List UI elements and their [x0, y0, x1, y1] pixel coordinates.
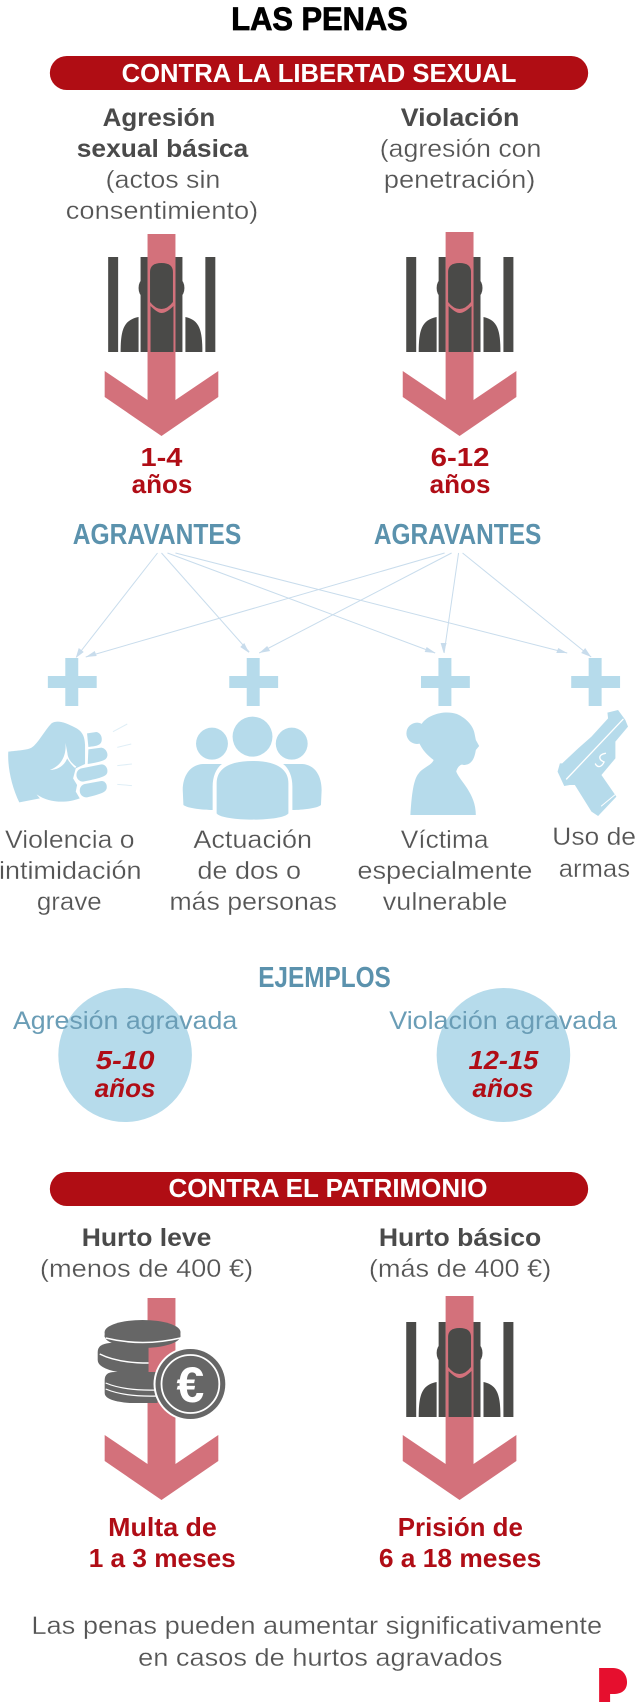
icon: fist — [8, 722, 132, 802]
example: agresión agravada: 5-10 — [96, 1047, 155, 1075]
icon: pistol — [558, 710, 628, 816]
logo — [599, 1668, 627, 1702]
label: Víctima — [401, 826, 489, 854]
arrow down — [403, 232, 516, 436]
heading pill: contra la libertad sexual — [50, 56, 588, 90]
text: agresión sexual básica: (actos sin — [106, 166, 220, 194]
text: agresión sexual básica: sexual básica — [77, 135, 249, 163]
example: agresión agravada — [13, 988, 237, 1122]
footnote: en casos de hurtos agravados — [138, 1644, 502, 1672]
panel: agresión sexual básica — [66, 104, 258, 499]
penalty: multa — [89, 1514, 236, 1573]
heading: agravantes left: AGRAVANTES — [73, 519, 241, 551]
heading: ejemplos: EJEMPLOS — [258, 962, 391, 994]
text: violación — [380, 104, 541, 194]
text: hurto básico: (más de 400 €) — [369, 1255, 551, 1283]
text: violación: (agresión con — [380, 135, 541, 163]
penalty: 1-4 años — [132, 444, 192, 499]
penalty: 1-4 años: 1-4 — [141, 444, 183, 472]
example: violación agravada: años — [473, 1075, 533, 1103]
icon: coins and euro: € — [177, 1357, 204, 1413]
icon: coins and euro — [98, 1320, 227, 1421]
text: agresión sexual básica: Agresión — [103, 104, 215, 132]
label — [357, 826, 532, 916]
text: hurto básico — [369, 1224, 551, 1283]
factor: víctima especialmente vulnerable — [357, 658, 532, 916]
label: Actuación — [193, 826, 312, 854]
icon: plus — [421, 658, 470, 706]
heading: agravantes right: AGRAVANTES — [374, 519, 541, 551]
arrow down — [403, 1296, 516, 1500]
title: LAS PENAS — [231, 1, 408, 37]
penalty: 6-12 años: 6-12 — [431, 444, 489, 472]
example: violación agravada — [389, 988, 617, 1122]
example: violación agravada: 12-15 — [469, 1047, 539, 1075]
text: violación: penetración) — [384, 166, 535, 194]
arrow down — [105, 1298, 218, 1500]
icon: prisoner behind bars — [406, 257, 513, 352]
penalty: multa: 1 a 3 meses — [89, 1545, 236, 1573]
text: agresión sexual básica — [66, 104, 258, 225]
footnote — [31, 1612, 602, 1672]
label: intimidación — [0, 857, 142, 885]
panel: violación — [380, 104, 541, 499]
icon: prisoner behind bars — [406, 1322, 513, 1417]
heading pill: contra el patrimonio — [50, 1172, 588, 1206]
icon: plus — [571, 658, 620, 706]
factor: uso de armas — [552, 658, 636, 883]
penalty: 6-12 años: años — [430, 471, 490, 499]
heading pill: contra el patrimonio: CONTRA EL PATRIMONIO — [168, 1175, 487, 1203]
label — [0, 826, 142, 916]
text: agresión sexual básica: consentimiento) — [66, 197, 258, 225]
panel: hurto leve — [40, 1224, 253, 1573]
penalty: 1-4 años: años — [132, 471, 192, 499]
text: violación: Violación — [401, 104, 519, 132]
panel: hurto básico — [369, 1224, 551, 1573]
penalty: 6-12 años — [430, 444, 490, 499]
label: de dos o — [197, 857, 301, 885]
heading pill: contra la libertad sexual: CONTRA LA LIBERTAD SEXUAL — [122, 60, 517, 88]
label: especialmente — [357, 857, 532, 885]
penalty: prisión: Prisión de — [398, 1514, 523, 1542]
icon: woman profile — [406, 712, 479, 815]
footnote: Las penas pueden aumentar significativamente — [31, 1612, 602, 1640]
label: más personas — [169, 888, 337, 916]
label — [552, 823, 636, 883]
factor: actuación de dos o más personas — [169, 658, 337, 916]
text: hurto básico: Hurto básico — [379, 1224, 541, 1252]
text: hurto leve — [40, 1224, 253, 1283]
icon: plus — [229, 658, 278, 706]
penalty: multa: Multa de — [108, 1514, 217, 1542]
penalty: prisión — [379, 1514, 541, 1573]
icon: plus — [48, 658, 97, 706]
label: Violencia o — [5, 826, 135, 854]
icon: group of people — [183, 717, 322, 820]
label: vulnerable — [383, 888, 507, 916]
icon: prisoner behind bars — [108, 257, 215, 352]
example: violación agravada: Violación agravada — [389, 1007, 617, 1035]
label: grave — [37, 888, 102, 916]
arrows: agravantes to factors — [76, 553, 591, 658]
arrow down — [105, 234, 218, 436]
label — [169, 826, 337, 916]
example: agresión agravada: Agresión agravada — [13, 1007, 237, 1035]
text: hurto leve: Hurto leve — [82, 1224, 211, 1252]
penalty: prisión: 6 a 18 meses — [379, 1545, 541, 1573]
example: agresión agravada: años — [95, 1075, 156, 1103]
label: Uso de — [552, 823, 636, 851]
text: hurto leve: (menos de 400 €) — [40, 1255, 253, 1283]
label: armas — [559, 855, 630, 883]
factor: violencia o intimidación grave — [0, 658, 142, 916]
